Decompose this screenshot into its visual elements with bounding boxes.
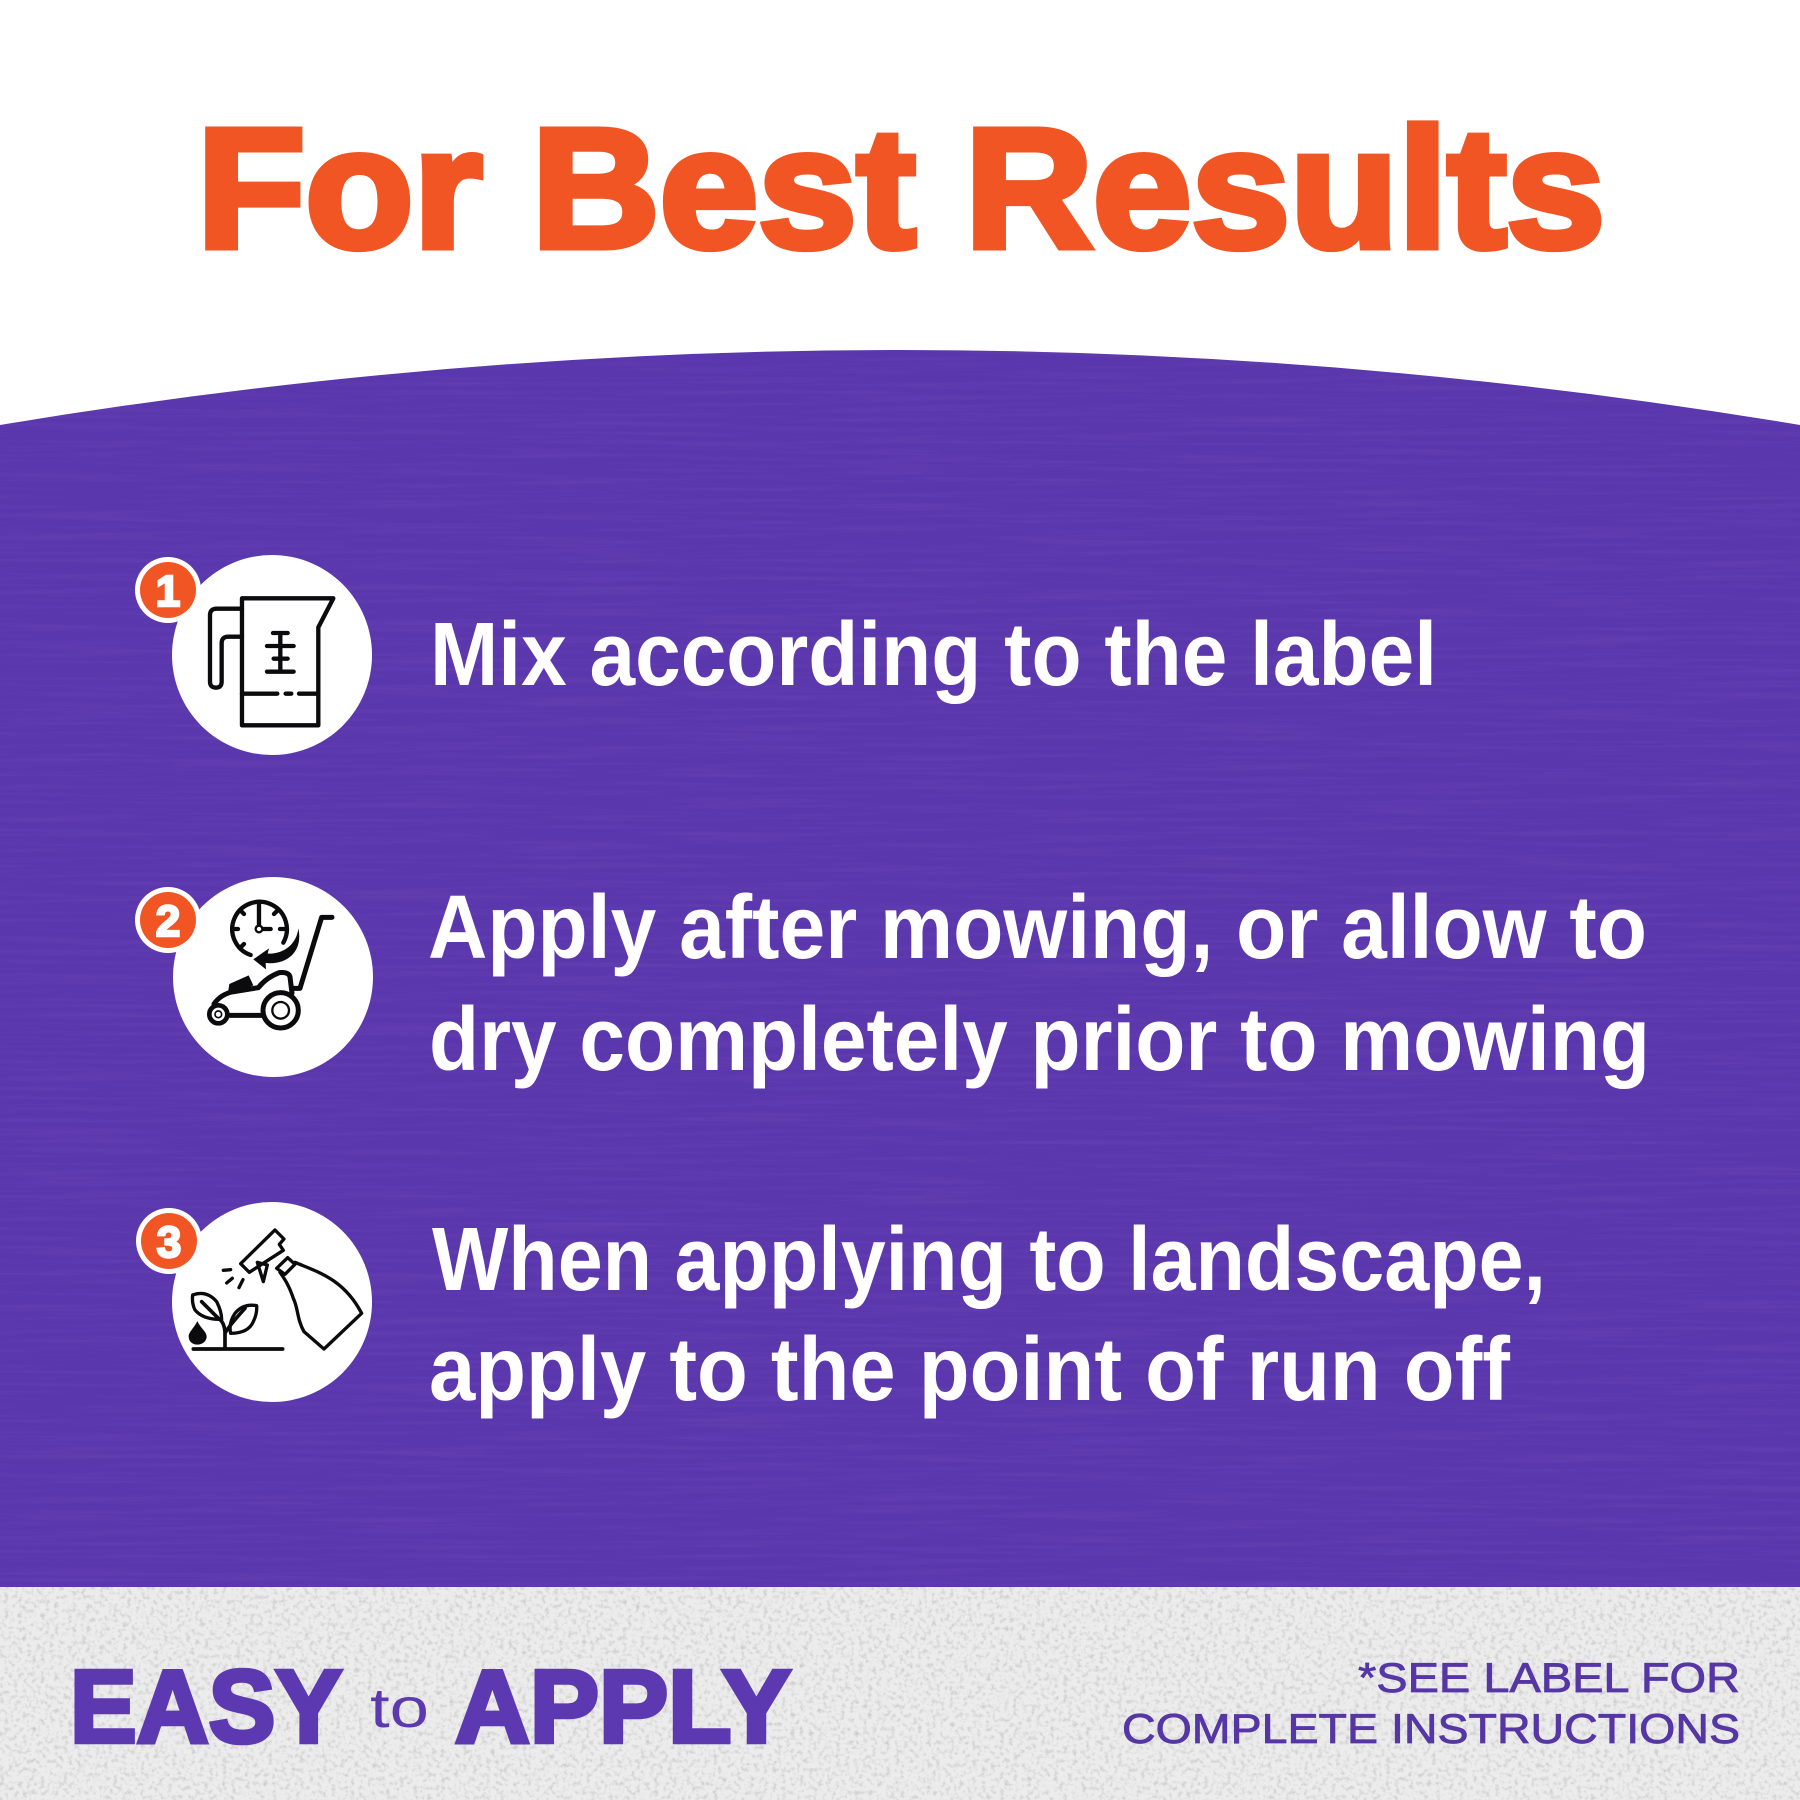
icon circle [172, 1202, 372, 1402]
footer heading: easy to apply: EASY [70, 1649, 342, 1764]
panel: purple textured background [0, 340, 1800, 1590]
icon circle [172, 555, 372, 755]
step 2 text [428, 878, 1650, 1090]
footer heading: easy to apply: to [370, 1676, 429, 1739]
panel: step 3 [136, 1202, 1546, 1420]
panel: step 2 [135, 877, 1650, 1090]
step 3 text: apply to the point of run off [429, 1320, 1511, 1420]
number badge 3: 3 [157, 1218, 181, 1267]
footer heading: easy to apply [70, 1649, 791, 1764]
icon: spray bottle and plant [189, 1230, 362, 1349]
footnote: *SEE LABEL FOR [1358, 1654, 1740, 1701]
icon: clock and lawn mower [209, 902, 332, 1028]
number badge 2: 2 [156, 897, 180, 946]
title: For Best Results [197, 94, 1605, 284]
step 3 text [429, 1210, 1546, 1420]
panel: textured footer band [0, 1587, 1800, 1800]
number badge 1: 1 [156, 567, 180, 616]
footer heading: easy to apply: APPLY [455, 1649, 791, 1764]
icon: measuring jug [210, 598, 333, 725]
number badge 2 [135, 887, 201, 953]
step 2 text: dry completely prior to mowing [429, 990, 1650, 1090]
step 3 text: When applying to landscape, [432, 1210, 1546, 1310]
panel: step 1 [135, 555, 1437, 755]
number badge 3 [136, 1208, 202, 1274]
footnote [1122, 1654, 1740, 1752]
step 2 text: Apply after mowing, or allow to [428, 878, 1647, 978]
icon circle [173, 877, 373, 1077]
step 1 text: Mix according to the label [430, 605, 1437, 705]
number badge 1 [135, 557, 201, 623]
footnote: COMPLETE INSTRUCTIONS [1122, 1705, 1740, 1752]
